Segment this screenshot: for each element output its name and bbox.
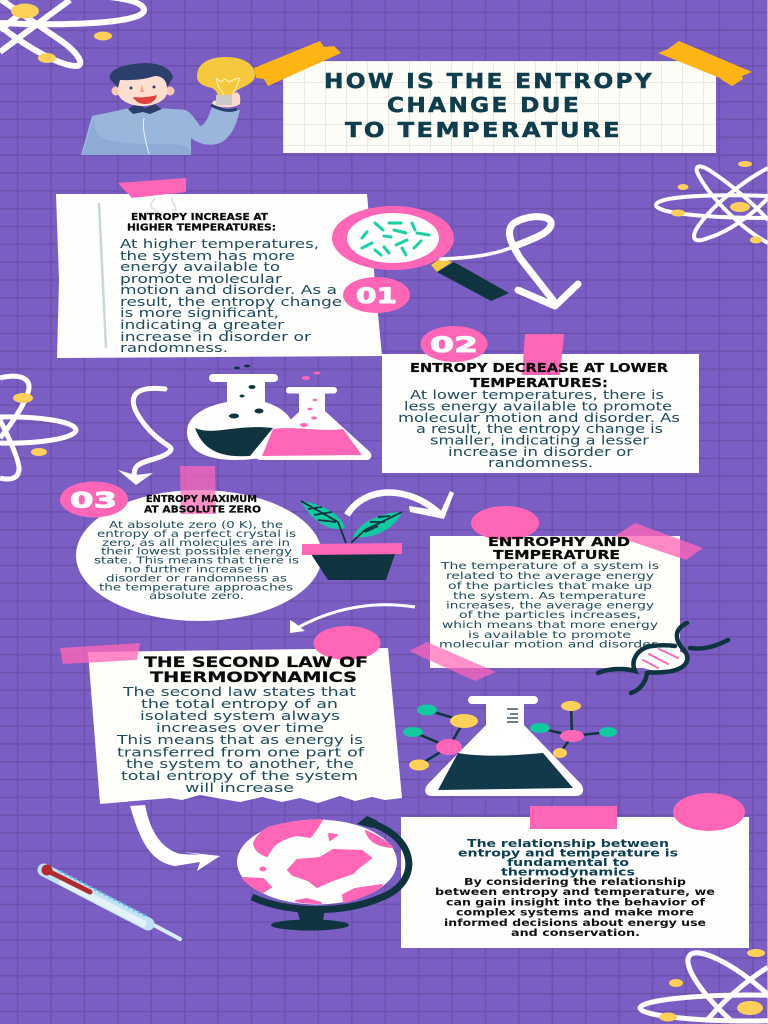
panel: entropy increase at higher temperatures [56, 178, 382, 358]
badge 03: 03 [70, 488, 117, 512]
pink circle [314, 626, 380, 660]
tape: pink [530, 806, 617, 829]
body text: related to the average energy [446, 571, 654, 582]
panel: relationship between entropy and temperature [401, 793, 749, 948]
badge 01: 01 [356, 284, 397, 308]
molecules [403, 701, 617, 770]
body text [398, 388, 680, 470]
body text: The temperature of a system is [440, 561, 659, 572]
body text: disorder or randomness as [106, 574, 287, 584]
body text: the total entropy of an [141, 697, 338, 711]
body text: At lower temperatures, there is [410, 388, 664, 402]
icon: atom bottom right [640, 949, 768, 1022]
panel: the second law of thermodynamics [60, 626, 402, 804]
badge 02: 02 [430, 333, 478, 357]
heading: ENTROPY DECREASE AT LOWER [410, 360, 668, 375]
icon: DNA strand [598, 623, 728, 693]
tape: pink [522, 334, 564, 375]
heading: ENTROPY INCREASE AT [131, 212, 269, 223]
heading: TEMPERATURE [493, 548, 620, 562]
body text: zero, as all molecules are in [102, 538, 290, 549]
tape: pink translucent [60, 643, 140, 664]
pink circle [471, 506, 539, 540]
body text: increase in disorder or [120, 330, 311, 344]
body text: promote molecular [120, 272, 282, 286]
body text: smaller, indicating a lesser [430, 434, 649, 448]
body text: molecular motion and disorder. [439, 640, 660, 650]
heading: entropy and temperature is [458, 848, 678, 860]
body text: molecular motion and disorder. As [398, 411, 680, 425]
body text: which means that more energy [442, 620, 658, 631]
icon: flask with molecules [403, 696, 617, 796]
tape: title left [254, 41, 341, 86]
body text: no further increase in [124, 564, 269, 576]
round flask [187, 364, 295, 460]
title text: HOW IS THE ENTROPY [324, 69, 654, 93]
tape: pink [118, 178, 186, 198]
head [110, 63, 174, 106]
character holding light bulb [81, 57, 255, 155]
title text [324, 69, 654, 142]
icon: atom left [0, 376, 76, 479]
panel: entropy decrease at lower temperatures [382, 334, 699, 473]
arrow: S curve down to panel 03 [118, 388, 171, 485]
body [81, 107, 240, 155]
body text: the system. As temperature [453, 591, 646, 602]
body text: the system has more [120, 249, 295, 263]
tape: title right [658, 41, 752, 86]
body text: isolated system always [140, 709, 340, 723]
badge 01 [343, 277, 410, 313]
heading: AT ABSOLUTE ZERO [144, 504, 261, 516]
arrow: loop down to panel 02 [441, 217, 578, 306]
arrow: plant to panel 4 [347, 491, 454, 519]
body text: can gain insight into the behavior of [446, 898, 706, 908]
hand and bulb base [212, 92, 240, 107]
heading: THERMODYNAMICS [150, 670, 357, 686]
body text: is available to promote [468, 630, 631, 641]
icon: atom top left [0, 0, 144, 66]
tape: left [409, 642, 496, 681]
heading [144, 655, 368, 686]
heading [127, 212, 276, 234]
body text: a result, the entropy change is [416, 422, 663, 436]
tape: pink translucent [180, 466, 216, 514]
body text: the system to another, the [126, 757, 354, 771]
icon: magnifying glass [332, 206, 509, 301]
heading [144, 494, 261, 516]
body text: At absolute zero (0 K), the [109, 520, 283, 531]
body text: The second law states that [122, 685, 356, 699]
heading: thermodynamics [501, 868, 635, 878]
body text: the temperature approaches [99, 582, 293, 594]
tape: right [615, 523, 703, 560]
title text: TO TEMPERATURE [345, 118, 622, 142]
title text: CHANGE DUE [387, 93, 581, 117]
icon: globe [237, 816, 409, 930]
body text: This means that as energy is [116, 733, 363, 747]
body text: transferred from one part of [117, 746, 365, 760]
heading [458, 839, 678, 878]
body text: energy available to [120, 260, 280, 274]
heading: The relationship between [467, 839, 669, 850]
body text [435, 877, 715, 939]
badge 02 [420, 326, 488, 362]
body text: At higher temperatures, [120, 237, 319, 251]
collar [128, 104, 162, 114]
body text: and conservation. [511, 928, 640, 939]
icon: potted plant [301, 501, 402, 580]
body text: indicating a greater [120, 318, 284, 332]
arrow: second law to globe [130, 805, 220, 871]
body text: By considering the relationship [464, 877, 686, 888]
body text: of the particles that make up [448, 581, 652, 592]
body text: is more significant, [120, 306, 279, 320]
heading: THE SECOND LAW OF [144, 655, 368, 671]
conical flask [255, 372, 371, 460]
body text: randomness. [488, 456, 593, 470]
body text: their lowest possible energy [101, 546, 292, 558]
body text: will increase [185, 781, 294, 795]
body text [94, 520, 299, 602]
body text [116, 685, 365, 795]
body text: result, the entropy change [120, 295, 342, 309]
heading: ENTROPY MAXIMUM [146, 494, 257, 505]
arrow: panel 4 to second law panel [290, 605, 415, 633]
heading: HIGHER TEMPERATURES: [127, 222, 276, 234]
heading: fundamental to [507, 858, 629, 869]
icon: light bulb [197, 57, 255, 100]
heading [488, 535, 630, 562]
pink circle [673, 793, 745, 831]
body text [120, 237, 342, 355]
body text: motion and disorder. As a [120, 283, 337, 297]
side rule [99, 203, 106, 348]
flask body [468, 696, 538, 704]
heading [410, 360, 668, 390]
body text: between entropy and temperature, we [435, 887, 715, 898]
body text: increases over time [156, 721, 324, 735]
body text: state. This means that there is [94, 556, 299, 566]
body text: increase in disorder or [448, 445, 633, 459]
body text: informed decisions about energy use [444, 918, 706, 929]
badge 03 [60, 482, 128, 518]
heading: TEMPERATURES: [470, 375, 608, 390]
body text: of the particles increases, [459, 610, 641, 621]
paper clip [151, 198, 176, 211]
body text [439, 561, 660, 650]
panel: entropy maximum at absolute zero [76, 466, 322, 621]
body text: less energy available to promote [404, 400, 672, 414]
body text: increases, the average energy [446, 600, 654, 612]
heading: ENTROPHY AND [488, 535, 630, 549]
body text: entropy of a perfect crystal is [97, 529, 296, 540]
icon: two flasks [187, 364, 371, 460]
body text: complex systems and make more [456, 908, 694, 918]
body text: randomness. [120, 341, 228, 355]
body text: absolute zero. [149, 591, 244, 602]
panel: entropy and temperature [409, 506, 703, 681]
body text: total entropy of the system [121, 769, 358, 783]
title panel [254, 41, 752, 153]
icon: atom right [656, 161, 768, 244]
icon: thermometer [42, 864, 180, 939]
